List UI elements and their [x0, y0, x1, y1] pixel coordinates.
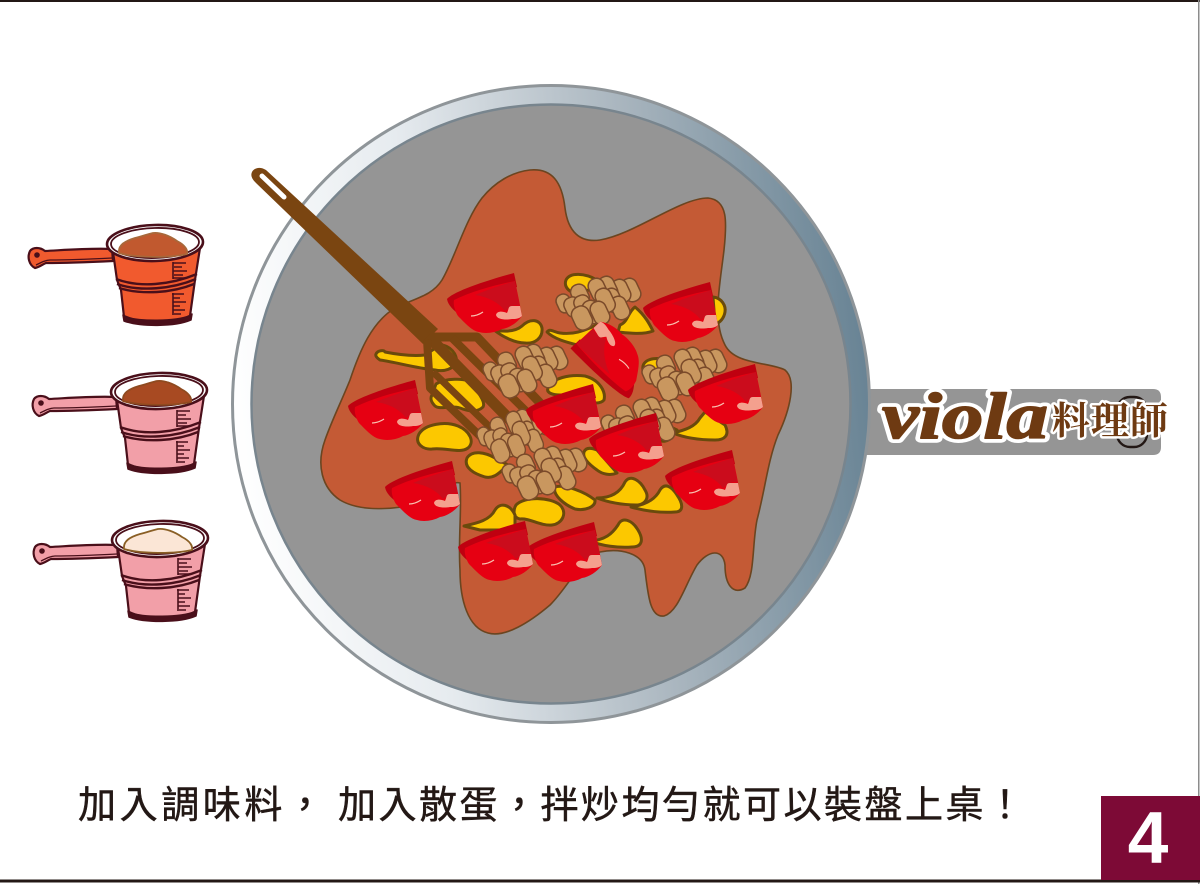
sauce spread [321, 170, 791, 634]
pan rim [232, 86, 870, 722]
pan handle [850, 389, 1161, 455]
spatula whisk [251, 168, 542, 438]
caption [78, 785, 1024, 827]
logo word viola: viola [882, 380, 1048, 453]
step number badge [1101, 796, 1200, 880]
logo word chef: 料理師 [1052, 401, 1168, 443]
measuring cup: pink with dark brown seasoning [33, 372, 207, 473]
measuring cup: red with brown seasoning [29, 224, 203, 325]
chopped beans [475, 274, 729, 503]
frying pan [232, 86, 870, 722]
beef slices [348, 273, 763, 582]
logo word viola fill: viola [882, 380, 1048, 453]
whisk handle [251, 168, 438, 344]
caption second clause: 加入散蛋，拌炒均勻就可以裝盤上桌！ [338, 785, 1024, 827]
viola chef logo [882, 380, 1168, 453]
scrambled egg pieces [376, 274, 727, 547]
handle hanging hole [1117, 397, 1147, 447]
handle slot [262, 176, 284, 197]
step number badge: 4 [1128, 798, 1169, 879]
caption first clause: 加入調味料， [78, 785, 324, 827]
measuring cup: pink with pale seasoning [34, 520, 208, 621]
whisk tines [427, 336, 542, 438]
pan cooking surface [252, 104, 850, 704]
